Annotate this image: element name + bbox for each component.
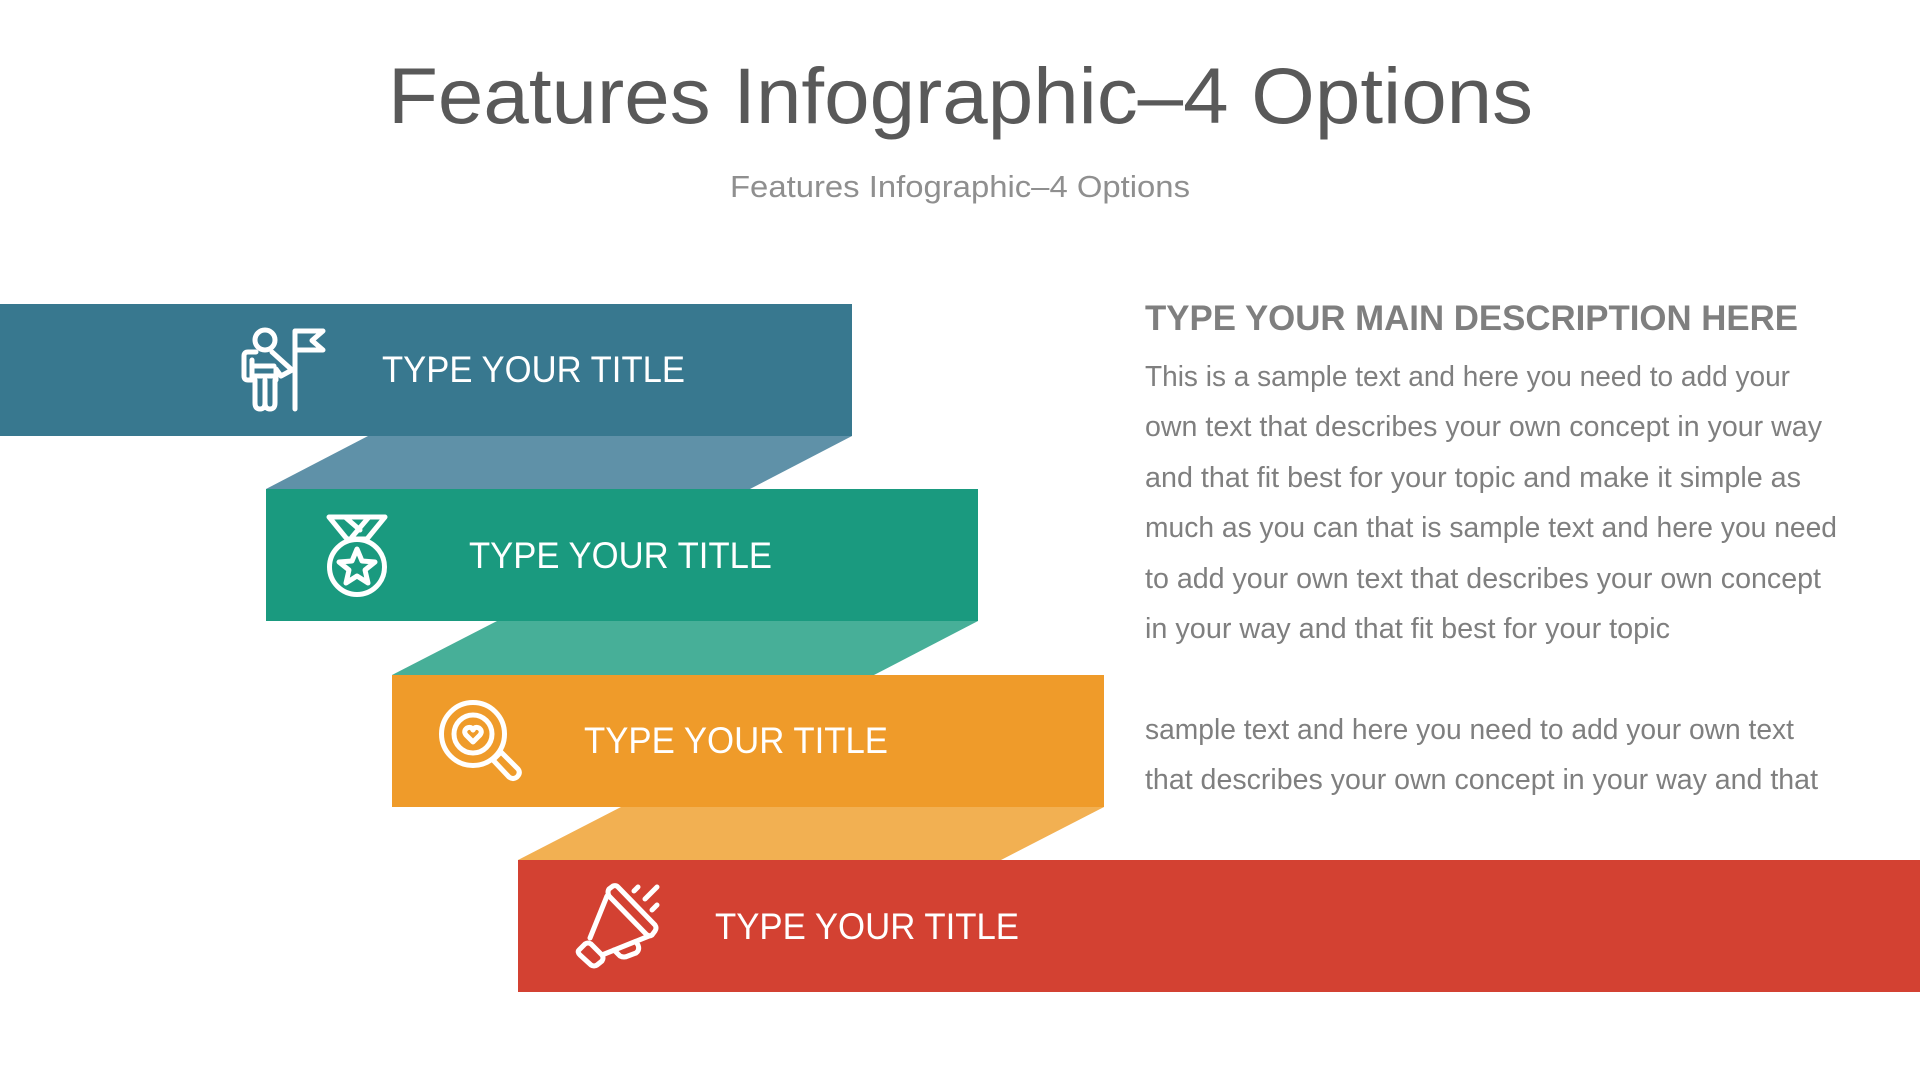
panel: step 4 red bar xyxy=(518,860,1920,992)
description paragraph 1: This is a sample text and here you need to add your xyxy=(1145,361,1790,393)
subtitle: Features Infographic–4 Options xyxy=(730,169,1190,204)
connector: orange to red xyxy=(518,807,1104,860)
bar background xyxy=(392,675,1104,807)
bar background xyxy=(518,860,1920,992)
bar title: TYPE YOUR TITLE xyxy=(715,906,1019,947)
icon: person with flag xyxy=(244,330,323,409)
bar background xyxy=(0,304,852,436)
description paragraph 1: own text that describes your own concept in your way xyxy=(1145,411,1822,443)
description paragraph 1: to add your own text that describes your own concept xyxy=(1145,563,1821,595)
bar title: TYPE YOUR TITLE xyxy=(584,720,888,761)
description paragraph 2: sample text and here you need to add your own text xyxy=(1145,714,1794,746)
bar title: TYPE YOUR TITLE xyxy=(469,535,772,576)
description heading: TYPE YOUR MAIN DESCRIPTION HERE xyxy=(1145,299,1798,338)
panel: step 1 blue bar xyxy=(0,304,852,436)
description paragraph 1: in your way and that fit best for your topic xyxy=(1145,613,1670,645)
panel: step 2 green bar xyxy=(266,489,978,621)
description paragraph 1: and that fit best for your topic and make it simple as xyxy=(1145,462,1801,494)
icon: megaphone xyxy=(578,886,657,966)
bar background xyxy=(266,489,978,621)
bar title: TYPE YOUR TITLE xyxy=(382,349,685,390)
connector: green to orange xyxy=(392,621,978,675)
connector: blue to green xyxy=(266,436,852,489)
panel: step 3 orange bar xyxy=(392,675,1104,807)
description paragraph 2 xyxy=(1145,714,1818,796)
icon: magnifier with heart xyxy=(442,702,519,778)
description paragraph 1 xyxy=(1145,361,1837,645)
description paragraph 2: that describes your own concept in your way and that xyxy=(1145,764,1818,796)
icon: medal with star xyxy=(329,517,385,594)
title: Features Infographic–4 Options xyxy=(388,51,1533,140)
description paragraph 1: much as you can that is sample text and here you need xyxy=(1145,512,1837,544)
